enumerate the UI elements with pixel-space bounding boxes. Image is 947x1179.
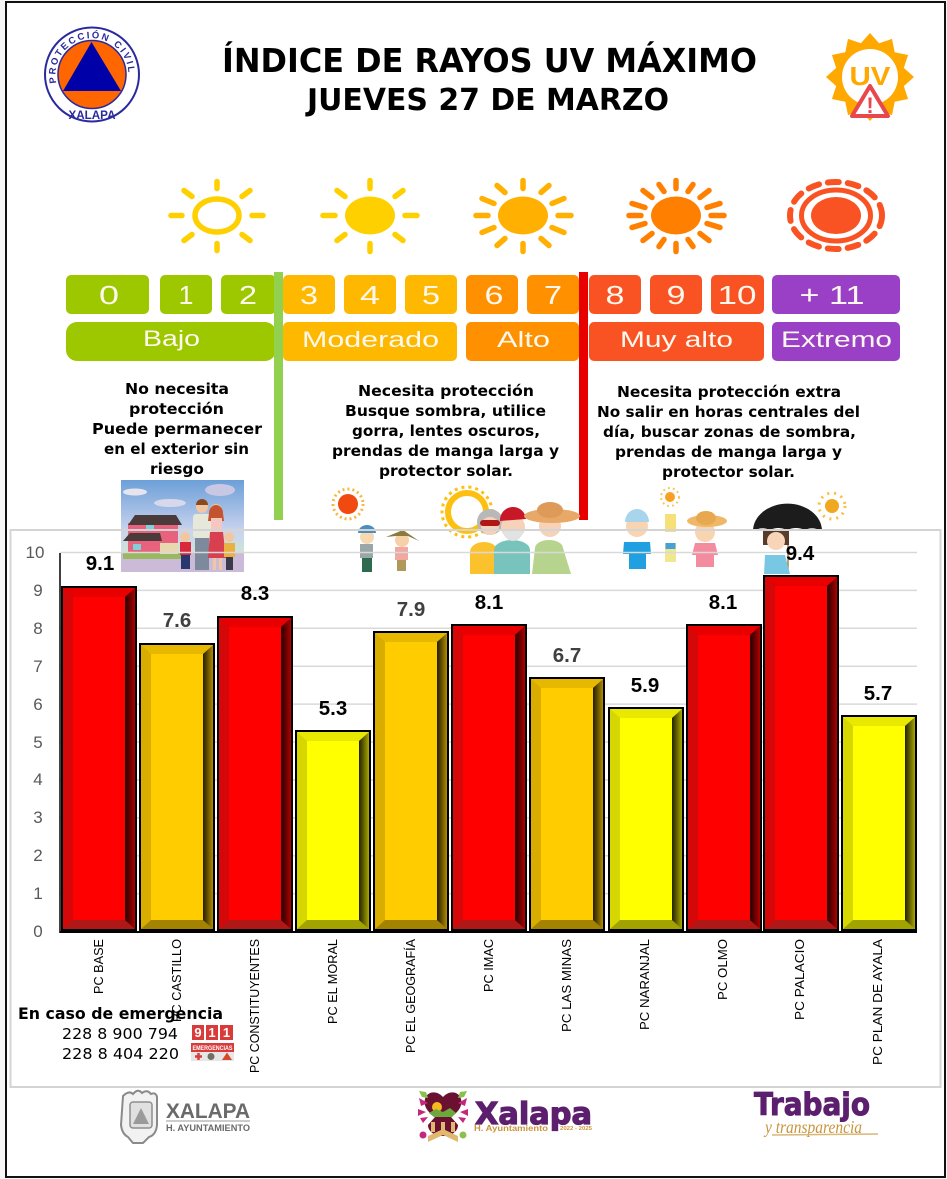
text: moderate risk advice: gorra, lentes oscuros, [352,422,540,440]
bar value labels: 8.1 [475,591,503,614]
text: low risk advice: riesgo [150,460,204,478]
y axis labels: 9 [33,581,43,600]
bar value labels: 5.7 [864,682,892,705]
text: low risk advice: en el exterior sin [104,440,249,458]
UV scale numbers: 10 [718,280,756,310]
text: moderate risk advice: Busque sombra, utilice [345,402,546,420]
y axis labels: 8 [33,619,43,638]
y axis labels: 2 [33,846,43,865]
red divider bar [579,272,588,520]
UV scale categories: Moderado [302,327,439,352]
y axis labels: 1 [33,884,43,903]
emergency contact text: 228 8 404 220 [62,1045,179,1063]
icon: 911 emergencias: 1 [223,1025,230,1040]
bar: PC PLAN DE AYALA 5.7 [843,717,915,929]
y axis labels: 7 [33,657,43,676]
icon: sun extreme [790,182,882,249]
bar value labels [86,542,892,720]
illustration: girl with umbrella and sun [753,493,845,574]
UV scale numbers: 3 [300,280,318,310]
bar value labels: 9.4 [786,542,815,565]
logo: H. Ayuntamiento crest and wordmark: XALAPA [166,1100,250,1123]
x axis category labels: PC PLAN DE AYALA [870,939,885,1065]
bar: PC PALACIO 9.4 [765,577,837,929]
bar value labels: 7.6 [163,609,191,632]
chart gridlines [60,590,917,894]
y axis labels: 10 [26,543,44,562]
text: low risk advice: protección [129,400,224,418]
text: low risk advice [92,380,263,478]
UV scale categories: Alto [497,327,550,352]
UV scale categories: Extremo [781,327,892,352]
x axis category labels: PC CASTILLO [169,939,184,1022]
text: high risk advice: Necesita protección extra [617,383,841,401]
icon: sun very high [629,180,724,252]
y axis labels: 4 [33,770,43,789]
bar: PC EL CASTILLO 7.6 [141,645,213,929]
illustration: children with sunscreen [623,488,727,569]
text: moderate risk advice: protector solar. [379,462,513,480]
text: high risk advice: protector solar. [662,463,795,481]
UV scale numbers [66,275,900,314]
text: low risk advice: Puede permanecer [92,420,263,438]
UV scale numbers: + 11 [800,280,864,310]
UV scale numbers: 9 [666,280,686,310]
x axis category labels: PC IMAC [481,939,496,992]
x axis category labels: PC EL GEOGRAFÍA [403,939,418,1053]
text: high risk advice [597,383,860,481]
bar value labels: 5.9 [631,674,659,697]
logo: Xalapa 2022-2025 [418,1091,592,1142]
bar value labels: 6.7 [553,644,581,667]
UV scale numbers: 4 [360,280,380,310]
green divider bar [274,272,283,520]
text: moderate risk advice: prendas de manga larga y [332,442,559,460]
y axis labels [26,543,44,941]
bar: PC NARANJAL 5.9 [610,709,682,929]
emergency contact text: 228 8 900 794 [62,1025,178,1043]
title: ÍNDICE DE RAYOS UV MÁXIMO [222,42,757,80]
title [222,42,757,118]
logo: Protección Civil Xalapa: XALAPA [68,108,116,122]
logo: Trabajo y transparencia [754,1087,878,1137]
y axis labels: 0 [33,922,43,941]
icon: UV warning sun [826,33,914,121]
UV scale numbers: 5 [422,280,440,310]
x axis category labels: PC PALACIO [792,939,807,1020]
bar: PC IMAC 8.1 [453,626,525,929]
bar value labels: 5.3 [319,697,347,720]
logo: Trabajo y transparencia: Trabajo [754,1087,870,1123]
text: high risk advice: día, buscar zonas de sombra, [603,423,856,441]
logo: Xalapa 2022-2025: 2022 - 2025 [560,1126,592,1132]
illustration: seniors with sunglasses and hats [442,487,580,574]
logo: Trabajo y transparencia: y transparencia [763,1117,862,1137]
bar: PC CONSTITUYENTES 8.3 [219,618,291,929]
icon: sun high [476,180,571,252]
emergency contact text [18,1004,223,1063]
icon: UV warning sun: ! [866,93,874,118]
UV scale numbers: 8 [606,280,624,310]
x axis category labels: PC NARANJAL [637,939,652,1030]
bar: PC EL MORAL 5.3 [297,732,369,929]
icon: sun low [171,182,263,250]
UV scale numbers: 2 [239,280,257,310]
logo: Xalapa 2022-2025: H. Ayuntamiento [474,1123,548,1133]
UV scale numbers: 6 [484,280,504,310]
chart panel [10,530,940,1087]
x axis category labels: PC CONSTITUYENTES [247,939,262,1073]
chart axes [60,553,917,933]
icon: 911 emergencias: 1 [208,1025,216,1040]
UV scale categories [66,322,900,361]
y axis labels: 5 [33,733,43,752]
text: low risk advice: No necesita [125,380,229,398]
x axis category labels: PC LAS MINAS [559,939,574,1032]
logo: H. Ayuntamiento crest and wordmark [121,1091,250,1143]
logo: Xalapa 2022-2025: Xalapa [475,1097,592,1132]
illustration: family and house [121,480,244,572]
UV scale numbers: 1 [178,280,194,310]
y axis labels: 3 [33,808,43,827]
UV scale numbers: 0 [99,280,119,310]
text: high risk advice: No salir en horas centrales del [597,403,860,421]
icon: 911 emergencias [191,1025,234,1061]
bar value labels: 8.1 [709,591,737,614]
logo: Protección Civil Xalapa: PROTECCIÓN CIVIL [48,30,134,84]
x axis category labels: PC OLMO [715,939,730,1000]
icon: sun moderate [323,180,417,252]
text: moderate risk advice: Necesita protección [358,382,534,400]
x axis category labels: PC BASE [91,939,106,994]
logo: Protección Civil Xalapa [44,26,140,122]
icon: UV warning sun: UV [850,61,891,91]
bar value labels: 7.9 [397,598,425,621]
text: high risk advice: prendas de manga larga y [615,443,842,461]
bar: PC LAS MINAS 6.7 [531,679,603,929]
icon: 911 emergencias: 9 [194,1025,202,1040]
bar: PC EL GEOGRAFÍA 7.9 [375,633,447,929]
title: JUEVES 27 DE MARZO [305,83,669,118]
text: moderate risk advice [332,382,559,480]
bar value labels: 8.3 [241,582,269,605]
x axis category labels: PC EL MORAL [325,939,340,1024]
emergency contact text: En caso de emergencia [18,1004,223,1023]
UV scale numbers: 7 [544,280,562,310]
bar: PC BASE 9.1 [63,588,135,929]
icon: 911 emergencias: EMERGENCIAS [192,1045,233,1052]
UV scale categories: Muy alto [620,327,733,352]
illustration: children with hats and sun [333,489,419,572]
y axis labels: 6 [33,695,43,714]
bar value labels: 9.1 [86,552,114,575]
UV scale categories: Bajo [143,326,200,351]
bar: PC OLMO 8.1 [688,626,760,929]
logo: H. Ayuntamiento crest and wordmark: H. AYUNTAMIENTO [166,1123,250,1133]
x axis category labels [91,939,885,1073]
